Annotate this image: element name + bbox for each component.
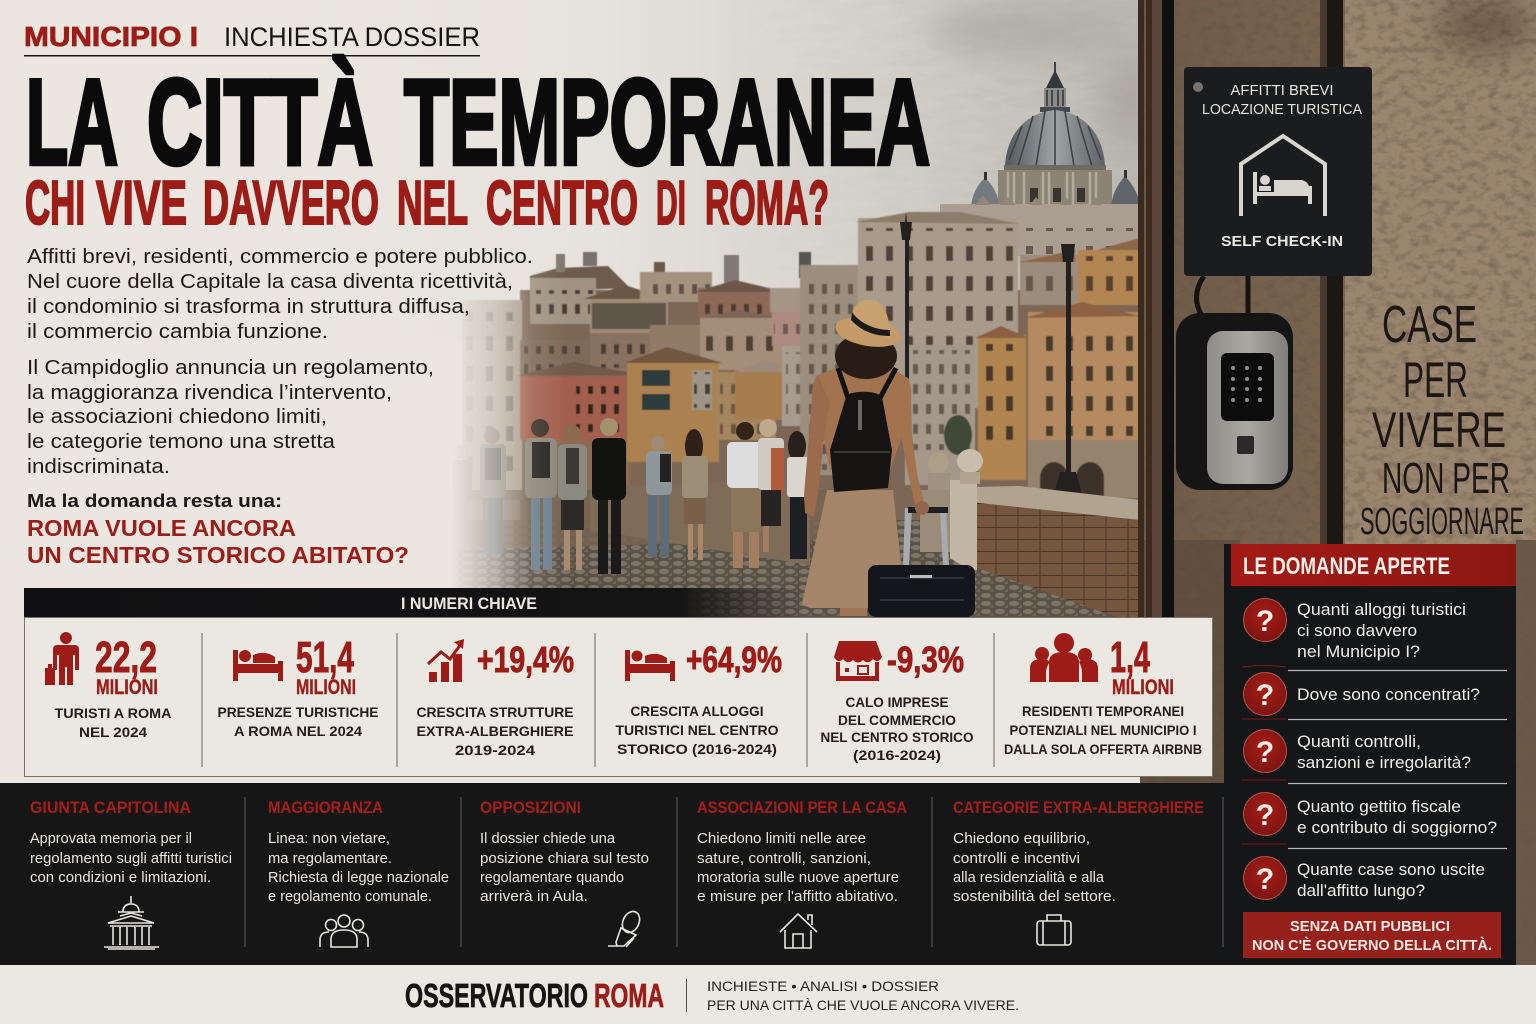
stat: tourists [45, 632, 172, 740]
icon: suitcase [1037, 915, 1071, 945]
title [26, 54, 930, 190]
key lockbox [1176, 276, 1293, 490]
stat: commerce decline: NEL CENTRO STORICO [820, 729, 974, 745]
stat: temporary residents: 1,4 [1110, 633, 1150, 682]
stat: commerce decline: (2016-2024) [853, 747, 941, 763]
column: categorie extra-alberghiere [953, 798, 1204, 945]
column: opposizioni [480, 798, 649, 947]
question 5: Quante case sono uscite [1297, 860, 1485, 879]
woman tourist with hat, backpack and suitcase [802, 300, 975, 617]
question 5: dall'affitto lungo? [1297, 881, 1425, 900]
masthead [24, 21, 480, 56]
wall writing: case per vivere non per soggiornare: PER [1403, 352, 1468, 408]
panel: open questions [1224, 544, 1516, 965]
stat: commerce decline [820, 639, 974, 763]
column: categorie extra-alberghiere: CATEGORIE EXTRA-ALBERGHIERE [953, 798, 1204, 817]
stat: tourist lodgings growth [616, 639, 782, 757]
column: maggioranza [268, 798, 449, 947]
building wall with pipes [1138, 0, 1536, 965]
callout: senza dati pubblici: SENZA DATI PUBBLICI [1290, 918, 1450, 935]
intro text: il commercio cambia funzione. [27, 321, 328, 343]
stat: extra-hotel growth [416, 639, 574, 758]
intro text: Affitti brevi, residenti, commercio e potere pubblico. [27, 246, 533, 268]
title: TEMPORANEA [404, 54, 930, 190]
stat: temporary residents: MILIONI [1112, 676, 1174, 699]
column: associazioni per la casa: ASSOCIAZIONI PER LA CASA [697, 798, 907, 817]
cobbled street [456, 486, 1116, 617]
column: opposizioni: posizione chiara sul testo [480, 851, 649, 867]
question 4: e contributo di soggiorno? [1297, 818, 1497, 837]
callout: senza dati pubblici [1243, 912, 1501, 958]
stat: tourist lodgings growth: CRESCITA ALLOGGI [630, 703, 764, 719]
column: maggioranza: Linea: non vietare, [268, 831, 390, 847]
callout: senza dati pubblici: NON C'È GOVERNO DELLA CITTÀ. [1252, 937, 1492, 954]
column: associazioni per la casa: e misure per l'affitto abitativo. [697, 889, 898, 905]
intro text: le categorie temono una stretta [27, 431, 336, 453]
stat: overnight stays: MILIONI [296, 676, 356, 699]
stat: overnight stays [218, 633, 378, 739]
question 1: ? [1256, 605, 1274, 638]
intro text: Il Campidoglio annuncia un regolamento, [27, 357, 434, 379]
stat: commerce decline: CALO IMPRESE [846, 694, 948, 710]
icon: house with bed [1241, 136, 1325, 216]
St Peter's dome and basilica [940, 62, 1140, 256]
question 4: ? [1256, 799, 1274, 832]
stat: overnight stays: PRESENZE TURISTICHE [218, 704, 378, 720]
column: giunta capitolina: con condizioni e limitazioni. [30, 870, 211, 886]
stat: tourists: 22,2 [95, 633, 157, 682]
key question: UN CENTRO STORICO ABITATO? [27, 542, 409, 568]
stat: tourists: NEL 2024 [79, 724, 147, 740]
panel: key numbers: I NUMERI CHIAVE [401, 594, 537, 613]
intro text [27, 246, 533, 478]
column: maggioranza: MAGGIORANZA [268, 798, 383, 817]
question 2 [1244, 672, 1480, 716]
question 3: sanzioni e irregolarità? [1297, 753, 1471, 772]
stat: tourists: TURISTI A ROMA [54, 705, 172, 721]
stone parapet and balusters [920, 449, 1140, 620]
wall writing: case per vivere non per soggiornare: CASE [1382, 296, 1477, 354]
question 2: Dove sono concentrati? [1297, 685, 1480, 704]
key question [27, 491, 409, 568]
stat: temporary residents: POTENZIALI NEL MUNICIPIO I [1010, 722, 1196, 738]
stat: extra-hotel growth: CRESCITA STRUTTURE [416, 704, 574, 720]
question 1: nel Municipio I? [1297, 642, 1420, 661]
subtitle [25, 169, 829, 238]
stat: extra-hotel growth: EXTRA-ALBERGHIERE [416, 723, 574, 739]
question 3: ? [1256, 736, 1274, 769]
column: associazioni per la casa: Chiedono limiti nelle aree [697, 831, 866, 847]
stat: commerce decline: -9,3% [887, 639, 964, 680]
wall writing: case per vivere non per soggiornare [1360, 296, 1524, 543]
intro text: indiscriminata. [27, 456, 170, 478]
icon: people [320, 915, 368, 947]
subtitle: CENTRO [486, 169, 638, 238]
crowd of tourists [452, 418, 809, 574]
column: associazioni per la casa: sature, controlli, sanzioni, [697, 851, 871, 867]
key question: ROMA VUOLE ANCORA [27, 515, 296, 541]
icon: microphone [608, 909, 643, 947]
stat: temporary residents [1004, 633, 1202, 757]
street lamps [900, 212, 1082, 494]
question 3: Quanti controlli, [1297, 732, 1421, 751]
column: associazioni per la casa: moratoria sulle nuove aperture [697, 870, 899, 886]
subtitle: DI [656, 169, 686, 238]
column: categorie extra-alberghiere: Chiedono equilibrio, [953, 831, 1090, 847]
intro text: il condominio si trasforma in struttura diffusa, [27, 296, 470, 318]
sign: affitti brevi: AFFITTI BREVI [1230, 82, 1334, 99]
column: categorie extra-alberghiere: controlli e incentivi [953, 851, 1080, 867]
question 4 [1244, 792, 1497, 837]
stat: tourist lodgings growth: STORICO (2016-2024) [617, 741, 777, 757]
column: giunta capitolina: GIUNTA CAPITOLINA [30, 798, 191, 817]
stat: tourist lodgings growth: +64,9% [686, 639, 782, 680]
question 1 [1244, 598, 1466, 661]
footer logo: OSSERVATORIO [405, 977, 588, 1014]
masthead: MUNICIPIO I [24, 21, 198, 52]
column: maggioranza: e regolamento comunale. [268, 889, 432, 905]
footer tagline: INCHIESTE • ANALISI • DOSSIER [707, 978, 939, 994]
stat: tourist lodgings growth: TURISTICI NEL CENTRO [616, 722, 779, 738]
question 1: ci sono davvero [1297, 621, 1417, 640]
heading: le domande aperte [1231, 544, 1516, 586]
question 3 [1244, 730, 1471, 772]
column: giunta capitolina: Approvata memoria per il [30, 831, 192, 847]
sky [645, 0, 1138, 290]
title: LA [26, 54, 118, 190]
stat: commerce decline: DEL COMMERCIO [838, 712, 956, 728]
key question: Ma la domanda resta una: [27, 491, 282, 511]
intro text: le associazioni chiedono limiti, [27, 406, 327, 428]
footer logo: ROMA [594, 977, 664, 1014]
column: opposizioni: OPPOSIZIONI [480, 798, 581, 817]
photo: Rome skyline with St Peter's dome and tourists [456, 0, 1138, 617]
stat: overnight stays: 51,4 [296, 633, 354, 682]
stat: overnight stays: A ROMA NEL 2024 [234, 723, 362, 739]
column: giunta capitolina [30, 798, 232, 949]
stat: extra-hotel growth: 2019-2024 [455, 742, 535, 758]
subtitle: ROMA? [705, 169, 829, 238]
stat: extra-hotel growth: +19,4% [477, 639, 574, 680]
question 5: ? [1256, 863, 1274, 896]
column: categorie extra-alberghiere: sostenibilità del settore. [953, 889, 1116, 905]
icon: house [780, 914, 817, 948]
question 1: Quanti alloggi turistici [1297, 600, 1466, 619]
question 5 [1244, 856, 1485, 900]
footer tagline: PER UNA CITTÀ CHE VUOLE ANCORA VIVERE. [707, 997, 1019, 1013]
cityscape and crowd faded at left [430, 62, 1150, 620]
subtitle: NEL [397, 169, 468, 238]
footer tagline [707, 978, 1019, 1013]
sign: affitti brevi: SELF CHECK-IN [1221, 233, 1343, 250]
stat: tourists: MILIONI [96, 676, 158, 699]
subtitle: CHI [25, 169, 85, 238]
heading: le domande aperte: LE DOMANDE APERTE [1243, 553, 1450, 580]
column: associazioni per la casa [697, 798, 907, 948]
stat: temporary residents: DALLA SOLA OFFERTA AIRBNB [1004, 741, 1202, 757]
column: opposizioni: arriverà in Aula. [480, 889, 588, 905]
column: categorie extra-alberghiere: alla residenzialità e alla [953, 870, 1105, 886]
column: maggioranza: Richiesta di legge nazionale [268, 870, 449, 886]
sign: affitti brevi [1184, 67, 1372, 276]
question 2: ? [1256, 679, 1274, 712]
panel: political positions [0, 783, 1225, 965]
intro text: Nel cuore della Capitale la casa diventa ricettività, [27, 271, 513, 293]
column: opposizioni: Il dossier chiede una [480, 831, 616, 847]
column: maggioranza: ma regolamentare. [268, 851, 392, 867]
intro text: la maggioranza rivendica l’intervento, [27, 382, 392, 404]
masthead: INCHIESTA DOSSIER [224, 22, 480, 52]
sign: affitti brevi: LOCAZIONE TURISTICA [1202, 101, 1362, 118]
icon: capitol building [104, 896, 159, 949]
footer band [0, 965, 1536, 1024]
panel: key numbers [24, 588, 1213, 777]
question 4: Quanto gettito fiscale [1297, 797, 1461, 816]
column: opposizioni: regolamentare quando [480, 870, 624, 886]
stat: temporary residents: RESIDENTI TEMPORANEI [1022, 703, 1184, 719]
title: CITTÀ [147, 54, 373, 190]
palaces behind [462, 212, 1140, 540]
subtitle: VIVE [96, 169, 187, 238]
subtitle: DAVVERO [203, 169, 379, 238]
column: giunta capitolina: regolamento sugli affitti turistici [30, 851, 232, 867]
